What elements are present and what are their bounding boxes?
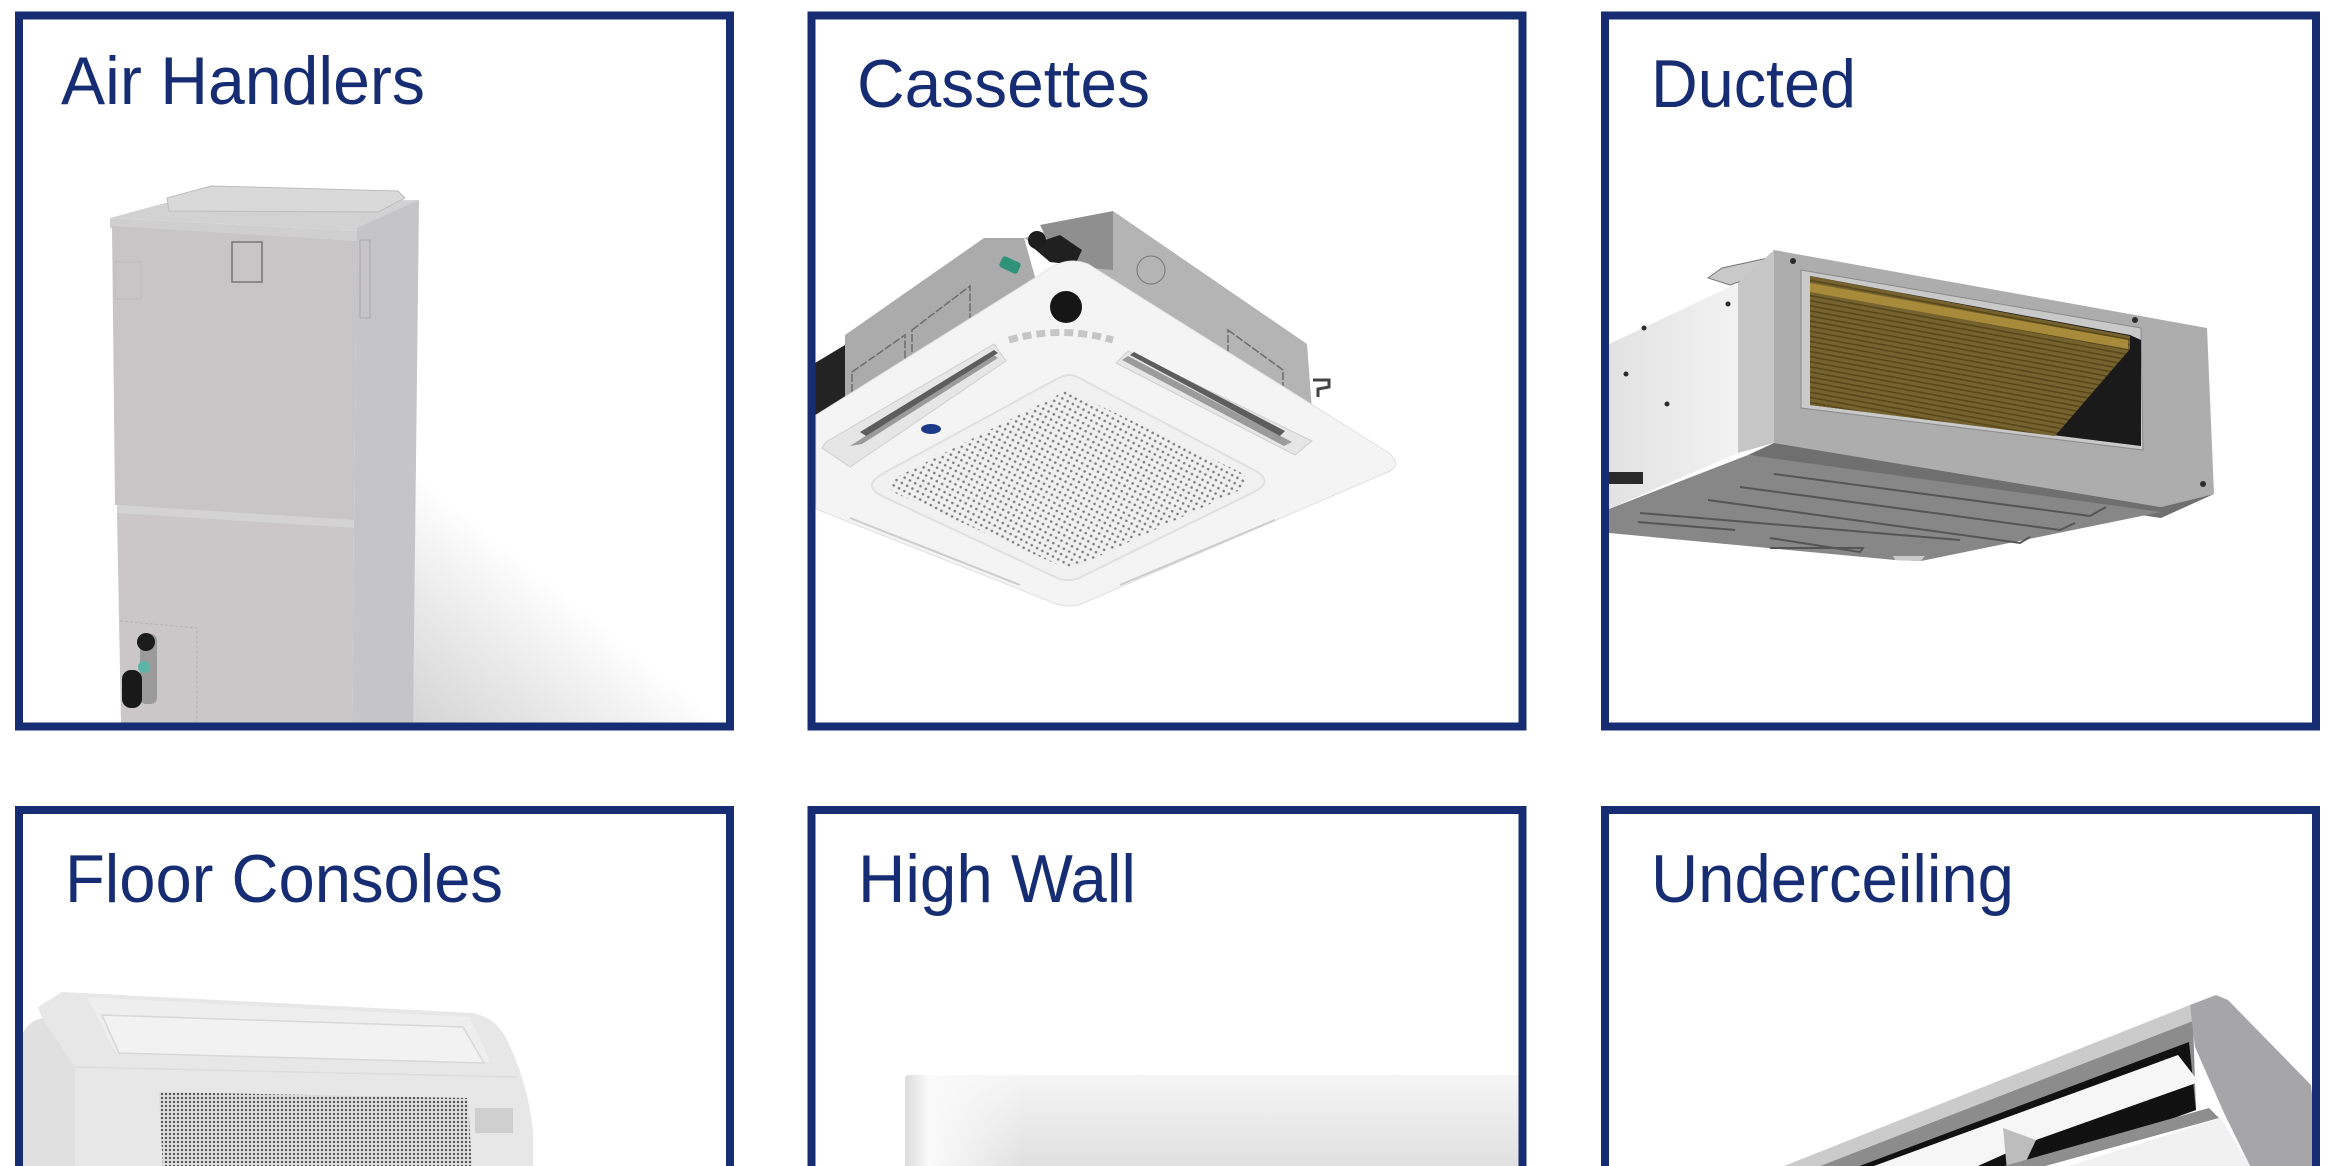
panel border bbox=[812, 16, 1522, 726]
panel border bbox=[1605, 16, 2316, 726]
panel border bbox=[19, 810, 730, 1166]
illustration: ducted unit bbox=[1609, 250, 2214, 561]
panel: floor consoles bbox=[19, 810, 730, 1166]
heading: Cassettes: Cassettes bbox=[857, 46, 1150, 122]
illustration: high wall unit bbox=[905, 1075, 1525, 1166]
illustration: ceiling cassette unit bbox=[815, 211, 1396, 606]
panel border bbox=[1605, 810, 2316, 1166]
illustration: air handler unit bbox=[110, 186, 726, 723]
panel: high wall bbox=[812, 810, 1525, 1166]
illustration: floor console unit bbox=[23, 992, 533, 1166]
panel border bbox=[812, 810, 1522, 1166]
illustration: underceiling unit bbox=[1774, 995, 2320, 1166]
heading: Air Handlers: Air Handlers bbox=[61, 43, 425, 119]
heading: Floor Consoles: Floor Consoles bbox=[65, 841, 503, 917]
panel: air handlers bbox=[19, 16, 730, 726]
panel: ducted bbox=[1605, 16, 2316, 726]
panel: underceiling bbox=[1605, 810, 2320, 1166]
heading: Underceiling: Underceiling bbox=[1651, 841, 2014, 917]
panel border bbox=[19, 16, 730, 726]
heading: High Wall: High Wall bbox=[858, 841, 1136, 917]
heading: Ducted: Ducted bbox=[1651, 46, 1856, 122]
panel: cassettes bbox=[812, 16, 1522, 726]
